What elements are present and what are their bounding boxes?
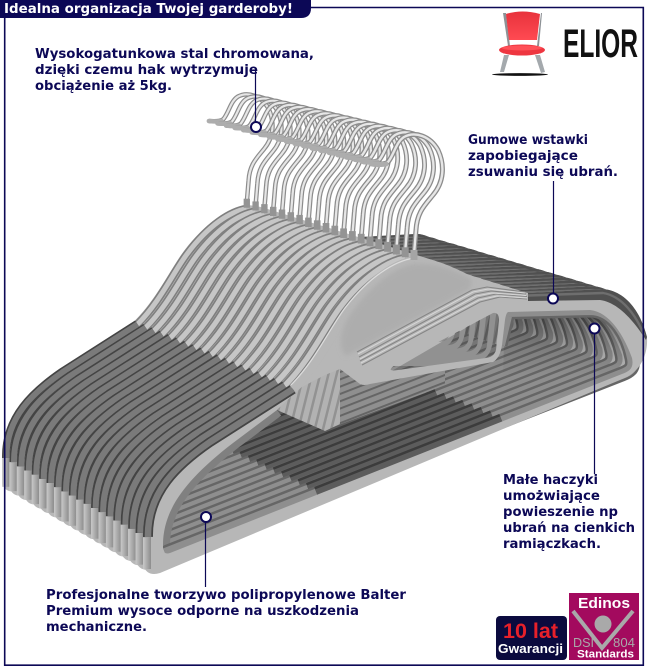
- badge: Edinos DSI 804 standards: Edinos: [578, 595, 630, 612]
- text block: Małe haczyki: [503, 473, 598, 488]
- text block: Premium wysoce odporne na uszkodzenia: [46, 604, 359, 619]
- badge: 10 year warranty: [496, 616, 567, 660]
- badge: 10 year warranty: 10 lat: [503, 620, 558, 643]
- text block: dzięki czemu hak wytrzymuje: [35, 63, 258, 78]
- text block: zapobiegające: [468, 149, 578, 164]
- logo: Elior chair and wordmark: [492, 12, 638, 76]
- badge: Edinos DSI 804 standards: Standards: [577, 648, 634, 660]
- icon: red chair: [492, 12, 548, 76]
- text block: ramiączkach.: [503, 537, 601, 552]
- badge: Edinos DSI 804 standards: 804: [613, 635, 635, 650]
- pointer: [590, 324, 600, 474]
- text block: obciążenie aż 5kg.: [35, 79, 172, 94]
- text block: [468, 133, 618, 180]
- callout: steel hook: [35, 47, 314, 132]
- callout: rubber inserts: [468, 133, 618, 304]
- text block: [35, 47, 314, 94]
- pointer: [201, 512, 211, 587]
- text block: mechaniczne.: [46, 620, 147, 635]
- text block: Wysokogatunkowa stal chromowana,: [35, 47, 314, 62]
- badge: Edinos DSI 804 standards: [569, 593, 639, 660]
- text block: powieszenie np: [503, 505, 618, 520]
- text block: zsuwaniu się ubrań.: [468, 165, 618, 180]
- text block: [46, 588, 407, 635]
- hanger stack illustration: [2, 94, 647, 574]
- text block: Profesjonalne tworzywo polipropylenowe Balter: [46, 588, 407, 603]
- text block: ubrań na cienkich: [503, 521, 635, 536]
- callout: polypropylene material: [46, 512, 407, 635]
- title banner: Idealna organizacja Twojej garderoby!: [4, 2, 293, 17]
- text block: Gumowe wstawki: [468, 133, 588, 148]
- callout: small hooks: [503, 324, 635, 552]
- text block: umożwiające: [503, 489, 600, 504]
- pointer: [548, 181, 558, 304]
- text block: [503, 473, 635, 552]
- badge: 10 year warranty: Gwarancji: [498, 642, 563, 656]
- badge: Edinos DSI 804 standards: DSI: [573, 635, 594, 650]
- pointer: [251, 71, 261, 132]
